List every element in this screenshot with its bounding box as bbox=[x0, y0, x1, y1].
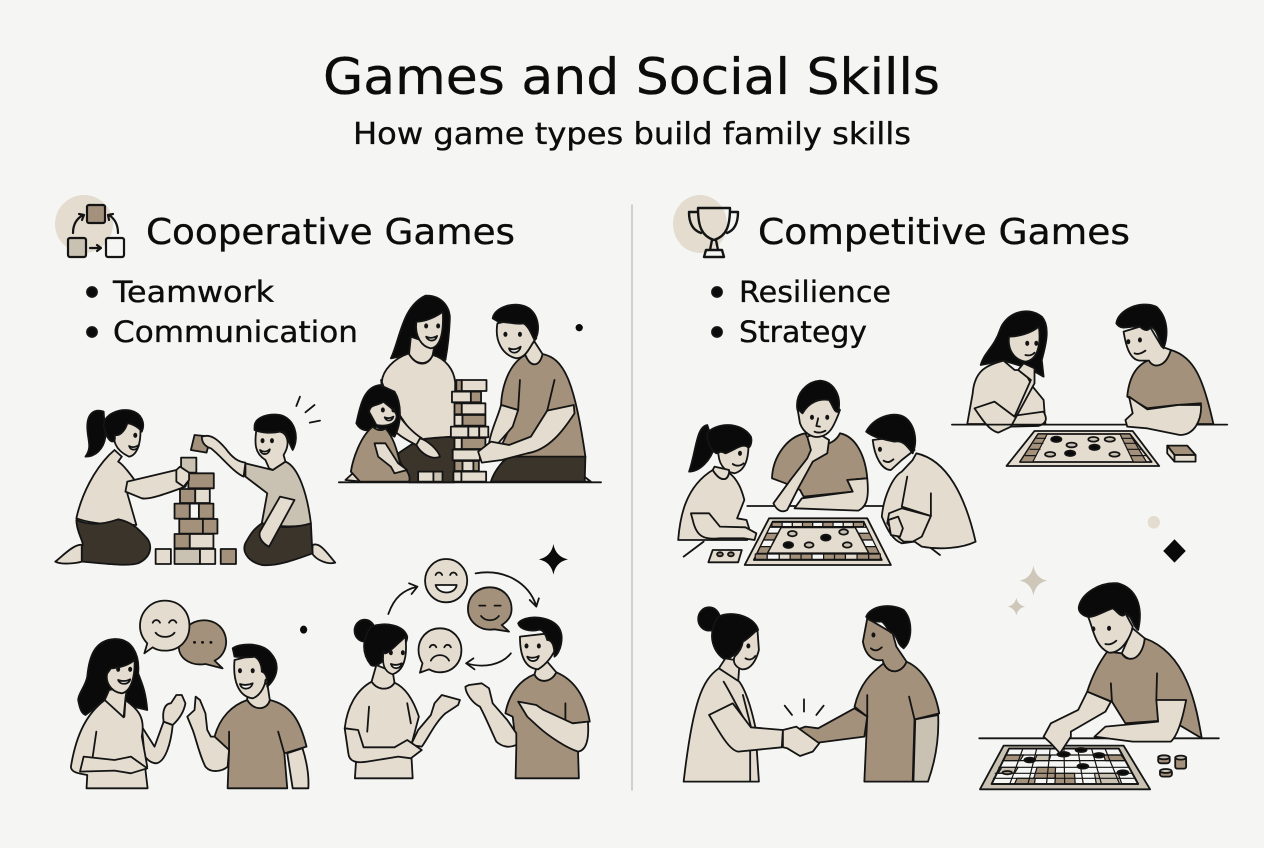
decorations: beige sparkles bbox=[1008, 566, 1047, 616]
panel: competitive games bbox=[673, 195, 1227, 789]
illustration: parents talking with speech bubbles bbox=[71, 601, 308, 788]
board game bbox=[745, 518, 891, 565]
heading: cooperative games: Cooperative Games bbox=[146, 212, 515, 253]
panel: cooperative games bbox=[55, 195, 601, 788]
board game bbox=[1007, 431, 1159, 466]
cards bbox=[708, 550, 742, 562]
bullet list: cooperative skills: Communication bbox=[113, 315, 358, 349]
illustration: solo player moving a piece bbox=[979, 583, 1219, 789]
illustration: couple at game table bbox=[952, 305, 1227, 466]
arrows: emotion cycle bbox=[388, 572, 539, 669]
card box bbox=[1167, 446, 1196, 462]
icon: trophy bbox=[673, 195, 738, 257]
handshake hands bbox=[783, 727, 819, 756]
speech bubble: smile bbox=[140, 601, 189, 653]
illustration: family playing block tower bbox=[339, 296, 601, 482]
counters bbox=[1158, 755, 1186, 777]
emoji: happy bbox=[425, 559, 467, 602]
bullet list: cooperative skills: Teamwork bbox=[112, 275, 274, 309]
decorations: dot and diamond bbox=[1148, 516, 1186, 563]
illustration: family board game bbox=[678, 381, 976, 565]
bullet list: competitive skills: Resilience bbox=[739, 275, 891, 309]
illustration: handshake after game bbox=[684, 606, 939, 782]
emoji: content bbox=[468, 587, 512, 632]
illustration: sharing emotions bbox=[345, 544, 590, 778]
checkers board bbox=[980, 746, 1150, 789]
bullet list: cooperative skills bbox=[87, 275, 358, 349]
icon: cooperative cycle bbox=[55, 195, 124, 257]
bullet list: competitive skills: Strategy bbox=[739, 315, 867, 349]
heading: competitive games: Competitive Games bbox=[758, 212, 1130, 253]
speech bubble: dots bbox=[179, 620, 226, 668]
emoji: sad bbox=[419, 628, 461, 673]
bullet list: competitive skills bbox=[712, 275, 891, 349]
subtitle: How game types build family skills bbox=[353, 117, 911, 152]
title: Games and Social Skills bbox=[323, 48, 940, 106]
illustration: children stacking blocks bbox=[55, 397, 335, 565]
